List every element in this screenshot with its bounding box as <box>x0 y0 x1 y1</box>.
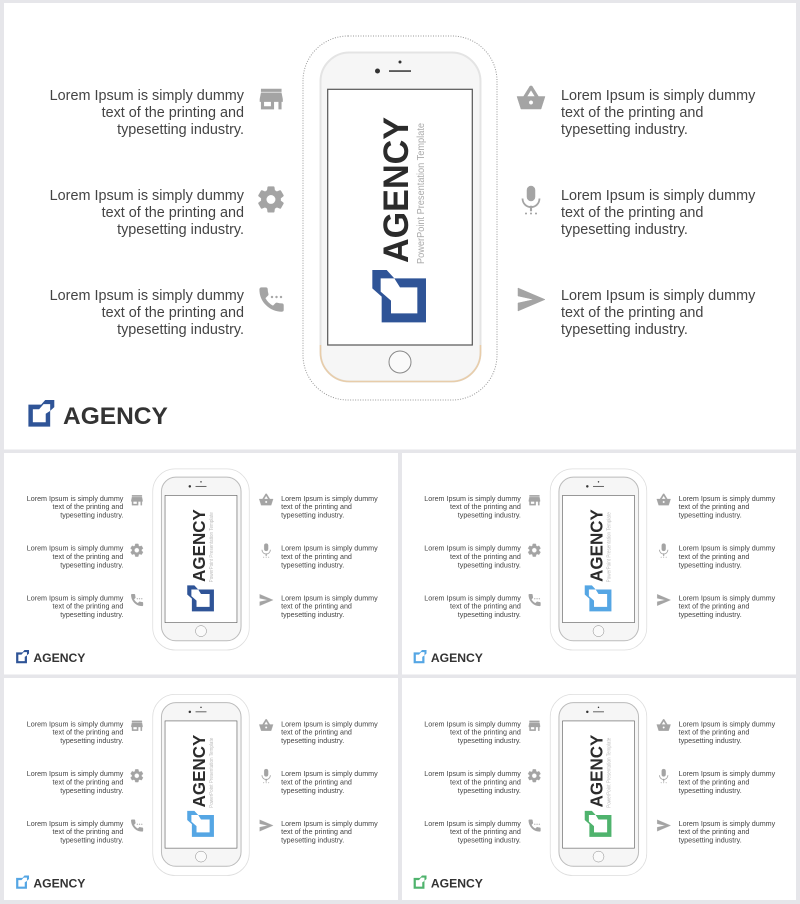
slide content <box>16 469 378 665</box>
left feature text: typesetting industry. <box>458 787 521 795</box>
screen logo <box>585 585 611 611</box>
icons <box>131 494 273 606</box>
left feature text: typesetting industry. <box>60 611 123 619</box>
right feature text: typesetting industry. <box>679 837 742 845</box>
slide content <box>414 469 776 665</box>
left feature text: text of the printing and <box>53 553 123 561</box>
left feature text: text of the printing and <box>53 778 123 786</box>
phone mockup <box>161 703 241 866</box>
right feature text: Lorem Ipsum is simply dummy <box>281 820 378 828</box>
left feature text: Lorem Ipsum is simply dummy <box>27 770 124 778</box>
corner logo <box>16 650 29 663</box>
right feature text: typesetting industry. <box>679 512 742 520</box>
right feature text: text of the printing and <box>679 553 749 561</box>
panel: green slide <box>402 678 796 900</box>
right feature text: Lorem Ipsum is simply dummy <box>281 495 378 503</box>
left feature text: typesetting industry. <box>458 737 521 745</box>
right feature text: text of the printing and <box>561 205 703 221</box>
screen logo <box>187 811 214 837</box>
left feature text: typesetting industry. <box>60 787 123 795</box>
right feature text: text of the printing and <box>281 603 352 611</box>
right feature text: text of the printing and <box>561 305 703 321</box>
left feature text <box>27 720 124 845</box>
screen logo <box>585 811 611 837</box>
left feature text: text of the printing and <box>53 828 123 836</box>
dotted phone outline <box>303 36 497 400</box>
screen brand name: AGENCY <box>377 117 416 263</box>
phone outline <box>153 469 249 650</box>
right feature text: typesetting industry. <box>281 512 344 520</box>
right feature text <box>281 720 378 845</box>
left feature text: Lorem Ipsum is simply dummy <box>27 544 124 553</box>
left feature text: Lorem Ipsum is simply dummy <box>424 544 521 553</box>
icons <box>528 719 671 831</box>
phone mockup <box>559 477 639 641</box>
left feature text: typesetting industry. <box>458 611 521 619</box>
right feature text: text of the printing and <box>281 729 352 737</box>
phone outline <box>153 694 249 876</box>
screen subtitle: PowerPoint Presentation Template <box>606 738 612 808</box>
right feature text: Lorem Ipsum is simply dummy <box>561 188 756 204</box>
panel: blue slide <box>4 453 398 674</box>
corner logo <box>414 876 427 889</box>
left feature text: Lorem Ipsum is simply dummy <box>424 495 521 503</box>
corner logo <box>16 876 29 889</box>
screen brand name: AGENCY <box>189 734 209 807</box>
right feature text: Lorem Ipsum is simply dummy <box>281 594 378 602</box>
right feature text: typesetting industry. <box>561 122 688 138</box>
right feature text: Lorem Ipsum is simply dummy <box>679 594 776 602</box>
right feature text: typesetting industry. <box>679 787 742 795</box>
right feature text: text of the printing and <box>679 503 749 511</box>
right feature text: text of the printing and <box>281 503 352 511</box>
left feature text: text of the printing and <box>450 503 521 511</box>
right feature text: typesetting industry. <box>561 322 688 338</box>
left feature text: Lorem Ipsum is simply dummy <box>424 820 521 828</box>
left feature text: text of the printing and <box>53 503 123 511</box>
left feature text: Lorem Ipsum is simply dummy <box>424 770 521 778</box>
left feature text: Lorem Ipsum is simply dummy <box>424 720 521 728</box>
left feature text: typesetting industry. <box>117 322 244 338</box>
phone mockup <box>161 477 241 641</box>
right feature text <box>679 720 776 845</box>
panel: sky blue slide bottom <box>4 678 398 900</box>
right feature text: text of the printing and <box>679 729 749 737</box>
slide content <box>16 694 378 890</box>
right feature text: typesetting industry. <box>679 737 742 745</box>
panel: sky blue slide top <box>402 453 796 674</box>
right feature text: text of the printing and <box>679 778 749 786</box>
right feature text: typesetting industry. <box>281 611 344 619</box>
left feature text: text of the printing and <box>450 778 521 786</box>
left feature text: Lorem Ipsum is simply dummy <box>27 820 124 828</box>
right feature text: typesetting industry. <box>679 611 742 619</box>
right feature text: Lorem Ipsum is simply dummy <box>679 544 776 553</box>
screen brand name: AGENCY <box>586 734 606 807</box>
left feature text: typesetting industry. <box>458 512 521 520</box>
corner logo <box>414 650 427 663</box>
left feature text: Lorem Ipsum is simply dummy <box>50 188 245 204</box>
left feature text: typesetting industry. <box>60 561 123 569</box>
left feature text: typesetting industry. <box>458 561 521 569</box>
icons <box>528 494 671 606</box>
right feature text: text of the printing and <box>679 828 749 836</box>
screen subtitle: PowerPoint Presentation Template <box>209 738 215 808</box>
left feature text: text of the printing and <box>53 603 123 611</box>
screen logo <box>187 585 214 611</box>
left feature text: typesetting industry. <box>60 737 123 745</box>
left feature text <box>424 720 521 845</box>
right feature text: Lorem Ipsum is simply dummy <box>281 770 378 778</box>
left feature text: Lorem Ipsum is simply dummy <box>27 594 124 602</box>
right feature text: typesetting industry. <box>561 222 688 238</box>
left feature text: text of the printing and <box>102 205 244 221</box>
left feature text: Lorem Ipsum is simply dummy <box>27 720 124 728</box>
icons: store, gear, call, basket, microphone, send <box>259 86 545 311</box>
right feature text: Lorem Ipsum is simply dummy <box>679 820 776 828</box>
corner brand name: AGENCY <box>431 651 483 665</box>
right feature text: typesetting industry. <box>281 737 344 745</box>
corner logo <box>28 400 54 427</box>
corner brand name: AGENCY <box>63 403 168 430</box>
left feature text: typesetting industry. <box>117 122 244 138</box>
right feature text: text of the printing and <box>281 778 352 786</box>
screen logo <box>372 270 426 322</box>
left feature text <box>27 495 124 619</box>
left feature text: Lorem Ipsum is simply dummy <box>27 495 124 503</box>
right feature text: Lorem Ipsum is simply dummy <box>281 544 378 553</box>
right feature text: typesetting industry. <box>281 561 344 569</box>
left feature text: text of the printing and <box>102 105 244 121</box>
right feature text: Lorem Ipsum is simply dummy <box>561 288 756 304</box>
right feature text: text of the printing and <box>561 105 703 121</box>
right feature text: Lorem Ipsum is simply dummy <box>679 495 776 503</box>
screen subtitle: PowerPoint Presentation Template <box>415 123 427 264</box>
screen subtitle: PowerPoint Presentation Template <box>606 512 612 582</box>
phone mockup <box>320 52 480 382</box>
left feature text <box>424 495 521 619</box>
right feature text <box>561 88 756 338</box>
screen brand name: AGENCY <box>189 509 209 582</box>
phone outline <box>550 694 647 876</box>
right feature text: Lorem Ipsum is simply dummy <box>679 770 776 778</box>
left feature text: typesetting industry. <box>117 222 244 238</box>
phone mockup <box>559 703 639 866</box>
slide content <box>28 36 756 430</box>
right feature text: Lorem Ipsum is simply dummy <box>281 720 378 728</box>
right feature text <box>281 495 378 619</box>
right feature text <box>679 495 776 619</box>
right feature text: typesetting industry. <box>281 787 344 795</box>
right feature text: typesetting industry. <box>281 837 344 845</box>
right feature text: typesetting industry. <box>679 561 742 569</box>
left feature text: text of the printing and <box>450 828 521 836</box>
right feature text: Lorem Ipsum is simply dummy <box>679 720 776 728</box>
corner brand name: AGENCY <box>33 876 85 890</box>
right feature text: text of the printing and <box>281 553 352 561</box>
left feature text: Lorem Ipsum is simply dummy <box>424 594 521 602</box>
panel: main slide <box>4 3 796 450</box>
left feature text: typesetting industry. <box>60 512 123 520</box>
screen brand name: AGENCY <box>586 509 606 582</box>
left feature text: text of the printing and <box>450 553 521 561</box>
left feature text: Lorem Ipsum is simply dummy <box>50 288 245 304</box>
left feature text: typesetting industry. <box>60 837 123 845</box>
right feature text: text of the printing and <box>679 603 749 611</box>
left feature text: text of the printing and <box>102 305 244 321</box>
corner brand name: AGENCY <box>431 876 483 890</box>
left feature text: Lorem Ipsum is simply dummy <box>50 88 245 104</box>
corner brand name: AGENCY <box>33 651 85 665</box>
icons <box>131 719 273 831</box>
right feature text: Lorem Ipsum is simply dummy <box>561 88 756 104</box>
left feature text: typesetting industry. <box>458 837 521 845</box>
left feature text: text of the printing and <box>53 729 123 737</box>
left feature text: text of the printing and <box>450 603 521 611</box>
slide content <box>414 694 776 890</box>
left feature text <box>50 88 245 338</box>
left feature text: text of the printing and <box>450 729 521 737</box>
right feature text: text of the printing and <box>281 828 352 836</box>
screen subtitle: PowerPoint Presentation Template <box>209 512 215 582</box>
phone outline <box>550 469 647 650</box>
